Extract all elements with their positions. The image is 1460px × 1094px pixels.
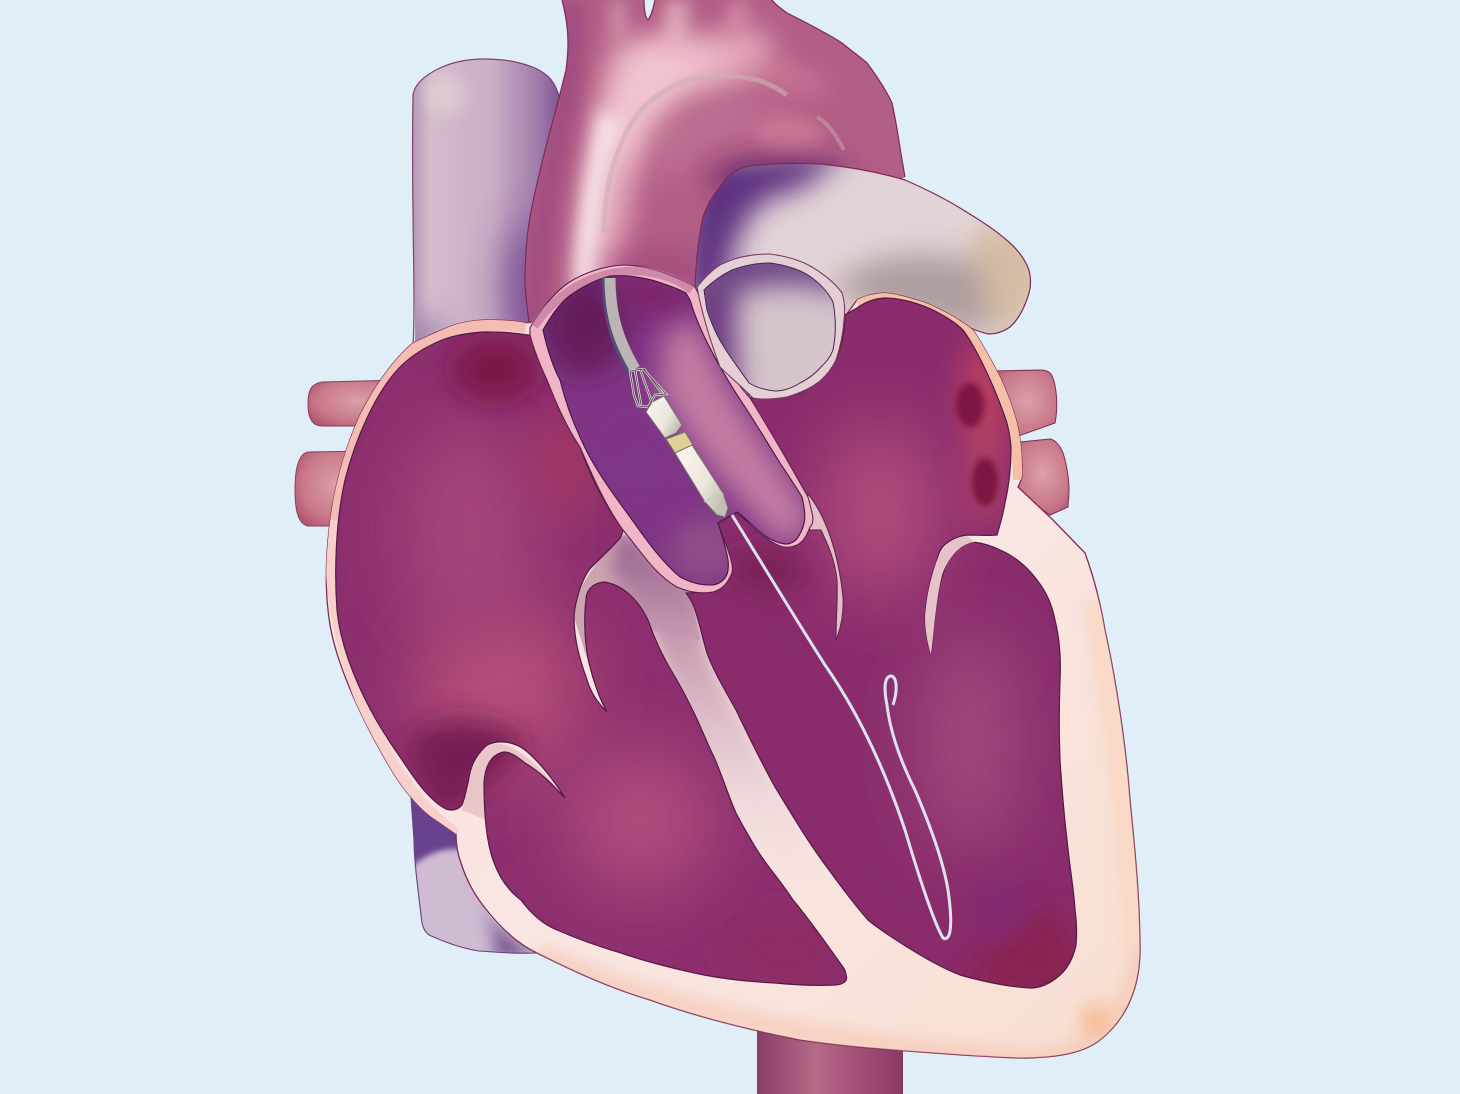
vessel: descending aorta <box>757 1020 903 1094</box>
pulmonary artery <box>694 162 1032 335</box>
valve leaflet: mitral right tint <box>925 536 975 655</box>
heart wall <box>326 293 1140 1058</box>
retrieval cage <box>630 369 666 407</box>
chamber: aortic root interior <box>542 275 806 586</box>
illustration: heart cross-section <box>294 0 1141 1094</box>
delivery catheter <box>609 278 635 370</box>
chamber: left atrium and left ventricle <box>680 290 1100 1000</box>
vessel: right pulmonary veins <box>990 370 1069 515</box>
aorta <box>524 0 906 322</box>
valve leaflet: mitral left <box>800 494 843 640</box>
guide wire <box>732 515 951 939</box>
pulmonary valve ring and bulb <box>696 254 846 400</box>
vessel: left pulmonary veins <box>295 380 400 526</box>
vessel: inferior vena cava <box>410 798 536 954</box>
chamber: right atrium and right ventricle <box>335 331 848 986</box>
vessel: superior vena cava <box>412 58 560 342</box>
leadless pacemaker capsule <box>646 396 728 517</box>
aortic root wall <box>530 265 813 593</box>
